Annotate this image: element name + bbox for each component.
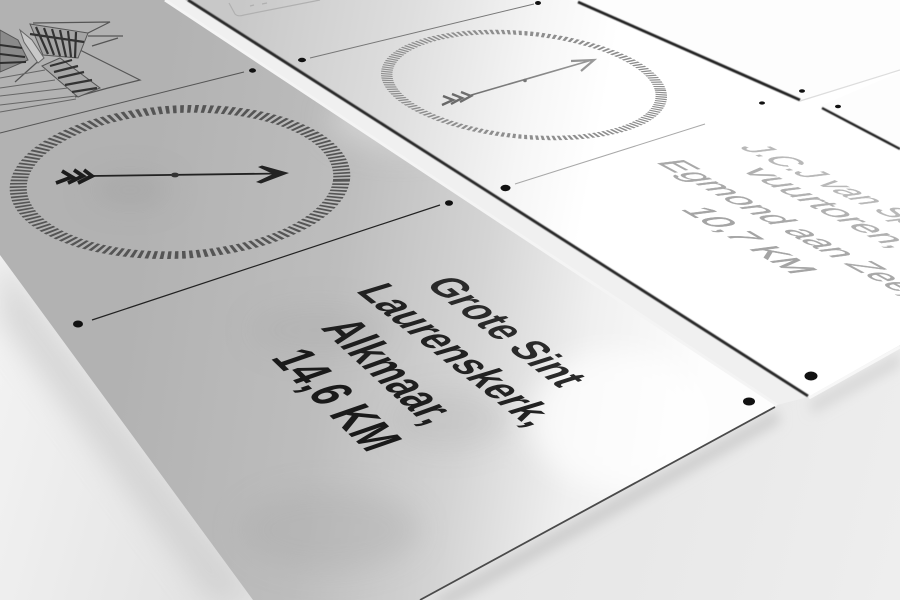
hole [799, 89, 805, 93]
arrow head [256, 166, 289, 184]
panel: third plate [572, 0, 900, 102]
cupola band [20, 30, 44, 63]
shadows under plates [0, 255, 900, 600]
divider line lower [515, 124, 705, 184]
arrow fletching [56, 170, 92, 183]
plate edge [188, 0, 808, 396]
text: Alkmaar: Alkmaar, [309, 312, 472, 430]
hole [835, 105, 841, 108]
highlight along right edge [165, 0, 777, 405]
panel: fourth plate [820, 72, 900, 150]
compass ring [371, 27, 677, 143]
compass arrow [56, 166, 289, 184]
lower edge [420, 407, 775, 600]
compass ring [9, 107, 351, 257]
mounting holes [73, 68, 755, 406]
plate lower edge [809, 347, 900, 398]
divider line lower [92, 205, 440, 320]
plate lower edge [800, 70, 900, 101]
gap between the plates [165, 0, 808, 405]
compass arrow [442, 60, 594, 105]
small sketch at top [229, 0, 320, 16]
tower [42, 58, 100, 97]
arrow shaft [90, 174, 280, 176]
divider line upper [0, 72, 244, 133]
mounting holes [298, 1, 818, 380]
panel: second plate [185, 0, 900, 398]
metal stains [312, 114, 618, 561]
arrow centre dot [171, 173, 179, 177]
plate edge [822, 108, 900, 149]
divider line upper [310, 4, 534, 58]
text: Laurenskerk: Laurenskerk, [345, 278, 571, 431]
cupola [30, 24, 88, 58]
illustration: church sketch [0, 22, 140, 112]
building outline [15, 22, 140, 97]
text: 14,6 KM: 14,6 KM [259, 342, 415, 457]
left building [0, 30, 28, 72]
plate edge [578, 2, 800, 100]
cupola hatching [30, 27, 84, 58]
base lines [0, 70, 76, 112]
text: 10,7 KM: 10,7 KM [672, 205, 827, 276]
text: Grote Sint: Grote Sint [414, 271, 599, 392]
